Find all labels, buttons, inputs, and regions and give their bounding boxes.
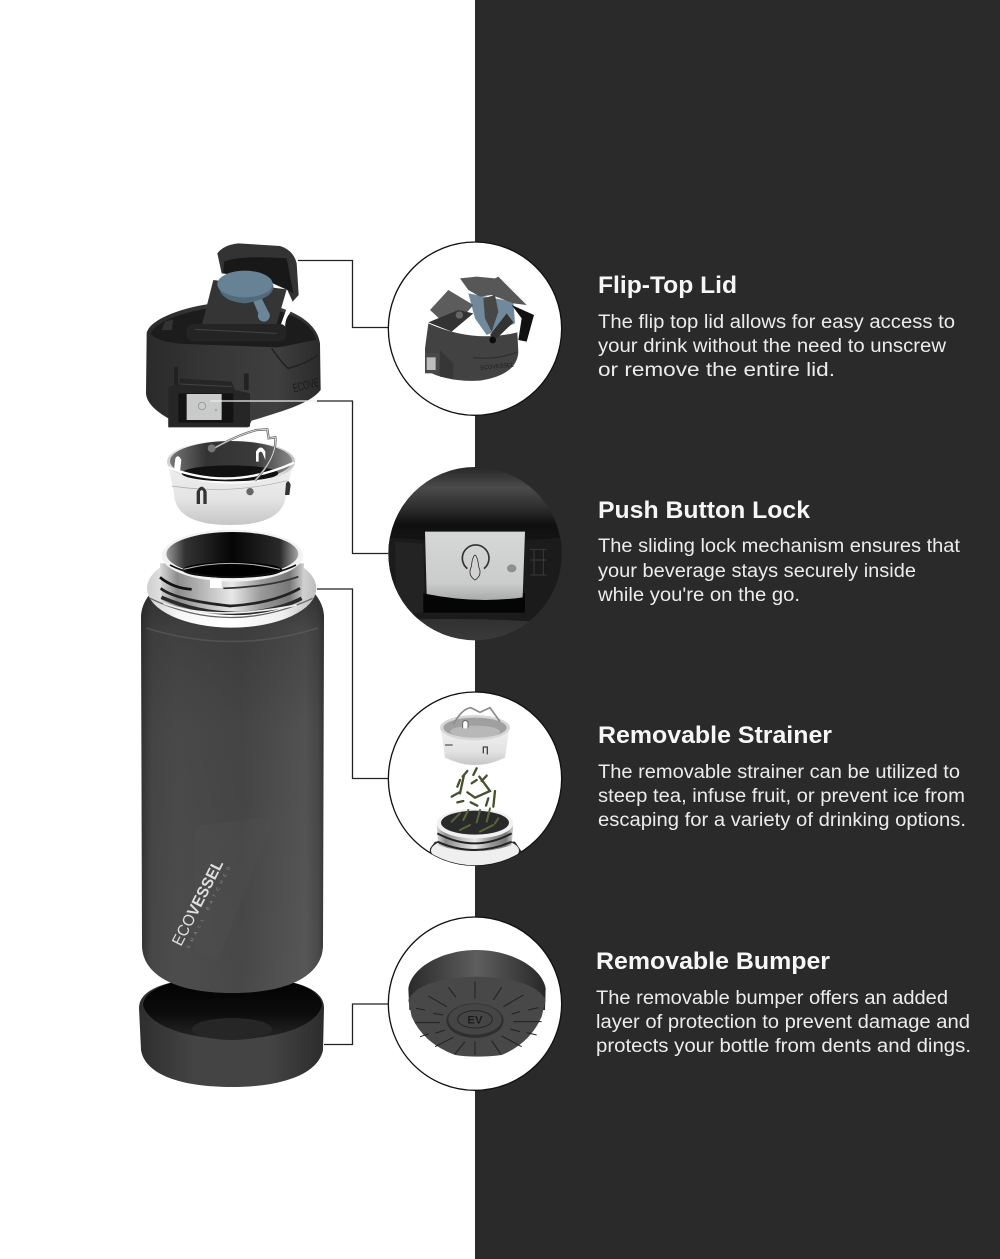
- description: your beverage stays securely inside: [598, 561, 916, 582]
- heading: Flip-Top Lid: [598, 272, 737, 299]
- description: layer of protection to prevent damage and: [596, 1012, 970, 1033]
- removable bumper: [139, 976, 324, 1087]
- description: steep tea, infuse fruit, or prevent ice from: [598, 786, 965, 807]
- dark background panel: [475, 0, 1000, 1259]
- bottle exploded view: [139, 243, 324, 1087]
- description: The removable strainer can be utilized to: [598, 762, 960, 783]
- description: The sliding lock mechanism ensures that: [598, 536, 961, 557]
- logo on bottle: SMALL BATCHED: [185, 862, 233, 949]
- line: flip-top lid: [298, 260, 388, 328]
- description: The removable bumper offers an added: [596, 988, 948, 1009]
- description: or remove the entire lid.: [598, 360, 835, 381]
- circle: flip-top lid detail: ECOVESSEL: [480, 363, 515, 372]
- description: your drink without the need to unscrew: [598, 336, 946, 357]
- feature: removable strainer text: [598, 722, 966, 831]
- strainer: [167, 429, 295, 525]
- description: protects your bottle from dents and dings.: [596, 1036, 971, 1057]
- description: [598, 312, 955, 381]
- flip-top lid: ECOVE: [291, 375, 321, 395]
- feature: removable bumper text: [596, 948, 971, 1057]
- heading: Removable Strainer: [598, 722, 832, 749]
- description: [597, 536, 961, 606]
- circle: flip-top lid detail: [388, 242, 562, 415]
- line: push button lock: [317, 401, 388, 554]
- feature: flip-top lid text: [598, 272, 955, 381]
- heading: Push Button Lock: [598, 497, 811, 524]
- flip-top lid: [146, 243, 321, 427]
- line: removable bumper: [324, 1004, 388, 1044]
- feature: push button lock text: [597, 497, 961, 606]
- description: escaping for a variety of drinking options.: [598, 810, 966, 831]
- bottle body: [141, 588, 324, 993]
- bottle neck: [147, 530, 316, 628]
- circle: removable bumper detail: [388, 917, 562, 1090]
- description: [598, 762, 966, 831]
- circle: push button lock detail: [387, 467, 563, 640]
- line: removable strainer: [317, 589, 388, 778]
- heading: Removable Bumper: [596, 948, 830, 975]
- description: while you're on the go.: [597, 585, 800, 606]
- circle: removable strainer detail: [388, 692, 562, 872]
- description: [596, 988, 971, 1057]
- logo on bottle: ECOVESSEL: [169, 857, 227, 949]
- circle: removable bumper detail: EV: [467, 1014, 483, 1026]
- leader lines: [210, 260, 388, 1044]
- line: push button start: [210, 400, 317, 402]
- description: The flip top lid allows for easy access to: [598, 312, 955, 333]
